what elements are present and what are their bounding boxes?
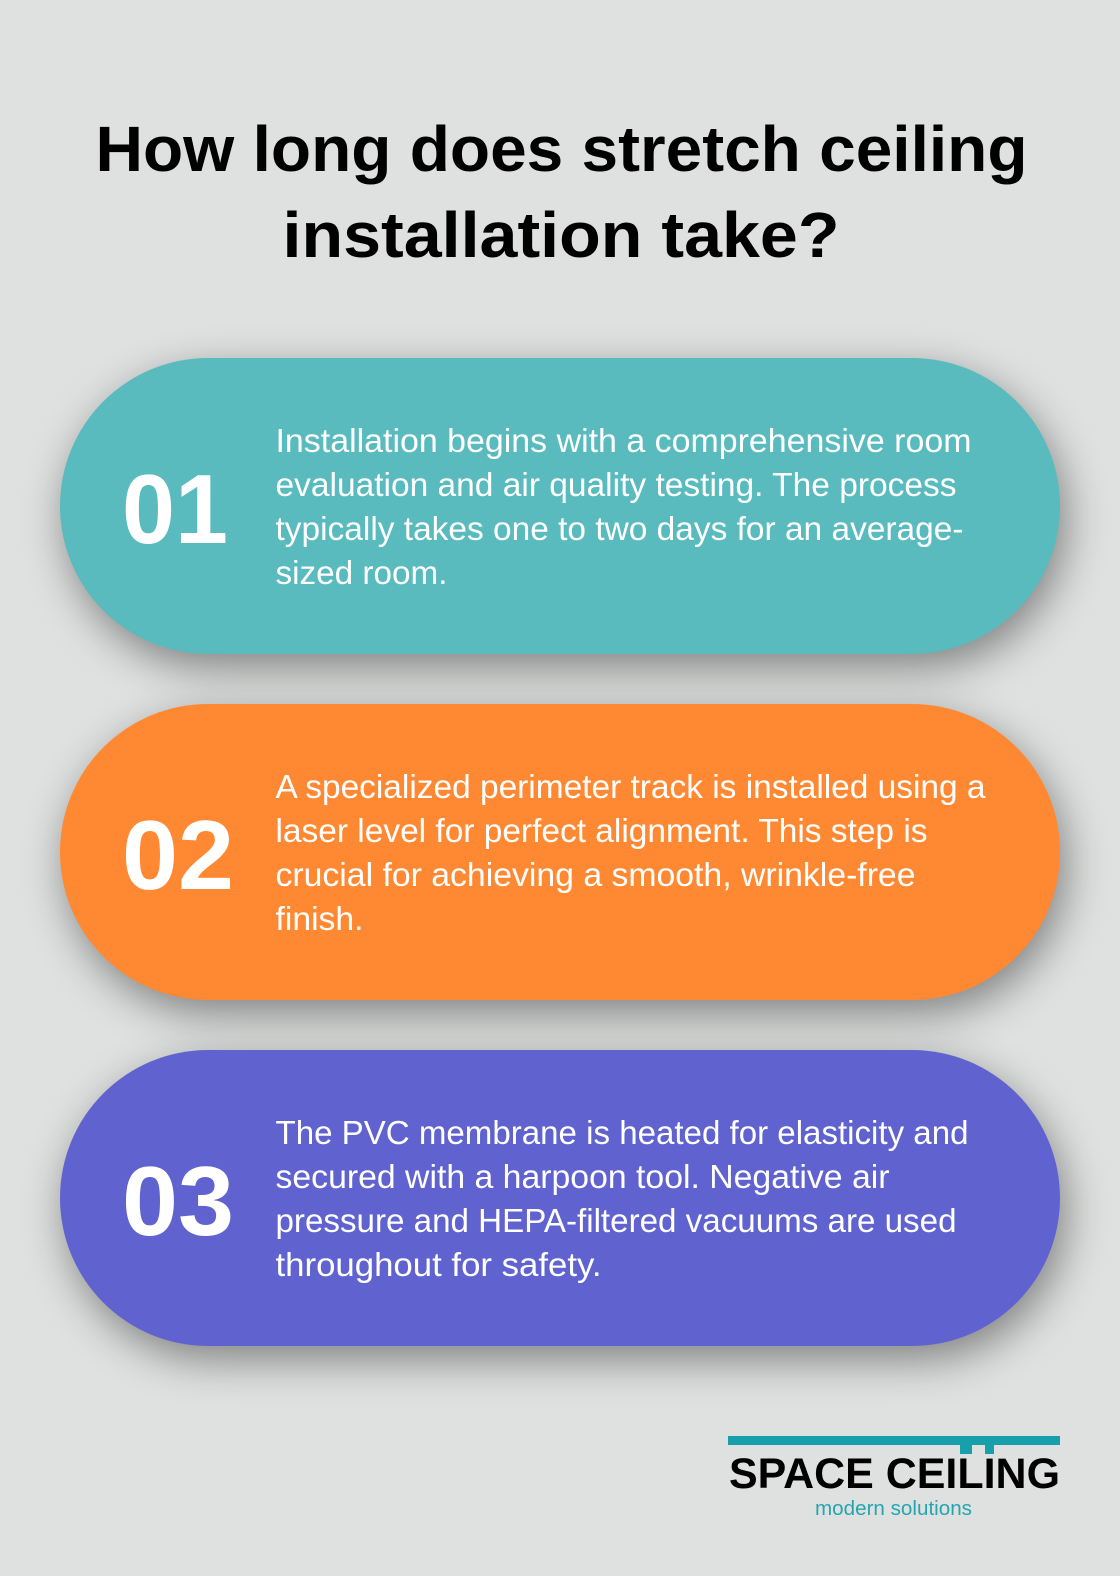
step 2 text: laser level for perfect alignment. This step is (276, 812, 928, 849)
title (96, 113, 1028, 271)
panel: step 2 pill (60, 704, 1060, 1000)
step 1 text: typically takes one to two days for an average- (276, 510, 964, 547)
logo wordmark: SPACE CEILING (729, 1450, 1060, 1498)
step 1 text: sized room. (276, 554, 448, 591)
step 1 text (276, 422, 972, 591)
step 3 text: secured with a harpoon tool. Negative air (276, 1158, 890, 1195)
logo: space ceiling (728, 1436, 1060, 1520)
step 3 number: 03 (122, 1146, 234, 1256)
step 3 text (276, 1114, 969, 1283)
step 2 text (276, 768, 986, 937)
step 1 text: Installation begins with a comprehensive room (276, 422, 972, 459)
panel: step 1 pill (60, 358, 1060, 654)
panel: step 3 pill (60, 1050, 1060, 1346)
step 1 text: evaluation and air quality testing. The process (276, 466, 957, 503)
step 3 text: throughout for safety. (276, 1246, 602, 1283)
logo tagline: modern solutions (815, 1498, 972, 1520)
step 2 number: 02 (122, 800, 234, 910)
step 2 text: finish. (276, 900, 364, 937)
title: installation take? (282, 199, 840, 271)
step 3 text: The PVC membrane is heated for elasticity and (276, 1114, 969, 1151)
step 2 text: crucial for achieving a smooth, wrinkle-free (276, 856, 916, 893)
logo ceiling bar (728, 1436, 1060, 1454)
title: How long does stretch ceiling (96, 113, 1028, 185)
step 1 number: 01 (122, 454, 228, 564)
step 3 text: pressure and HEPA-filtered vacuums are used (276, 1202, 956, 1239)
step 2 text: A specialized perimeter track is installed using a (276, 768, 986, 805)
